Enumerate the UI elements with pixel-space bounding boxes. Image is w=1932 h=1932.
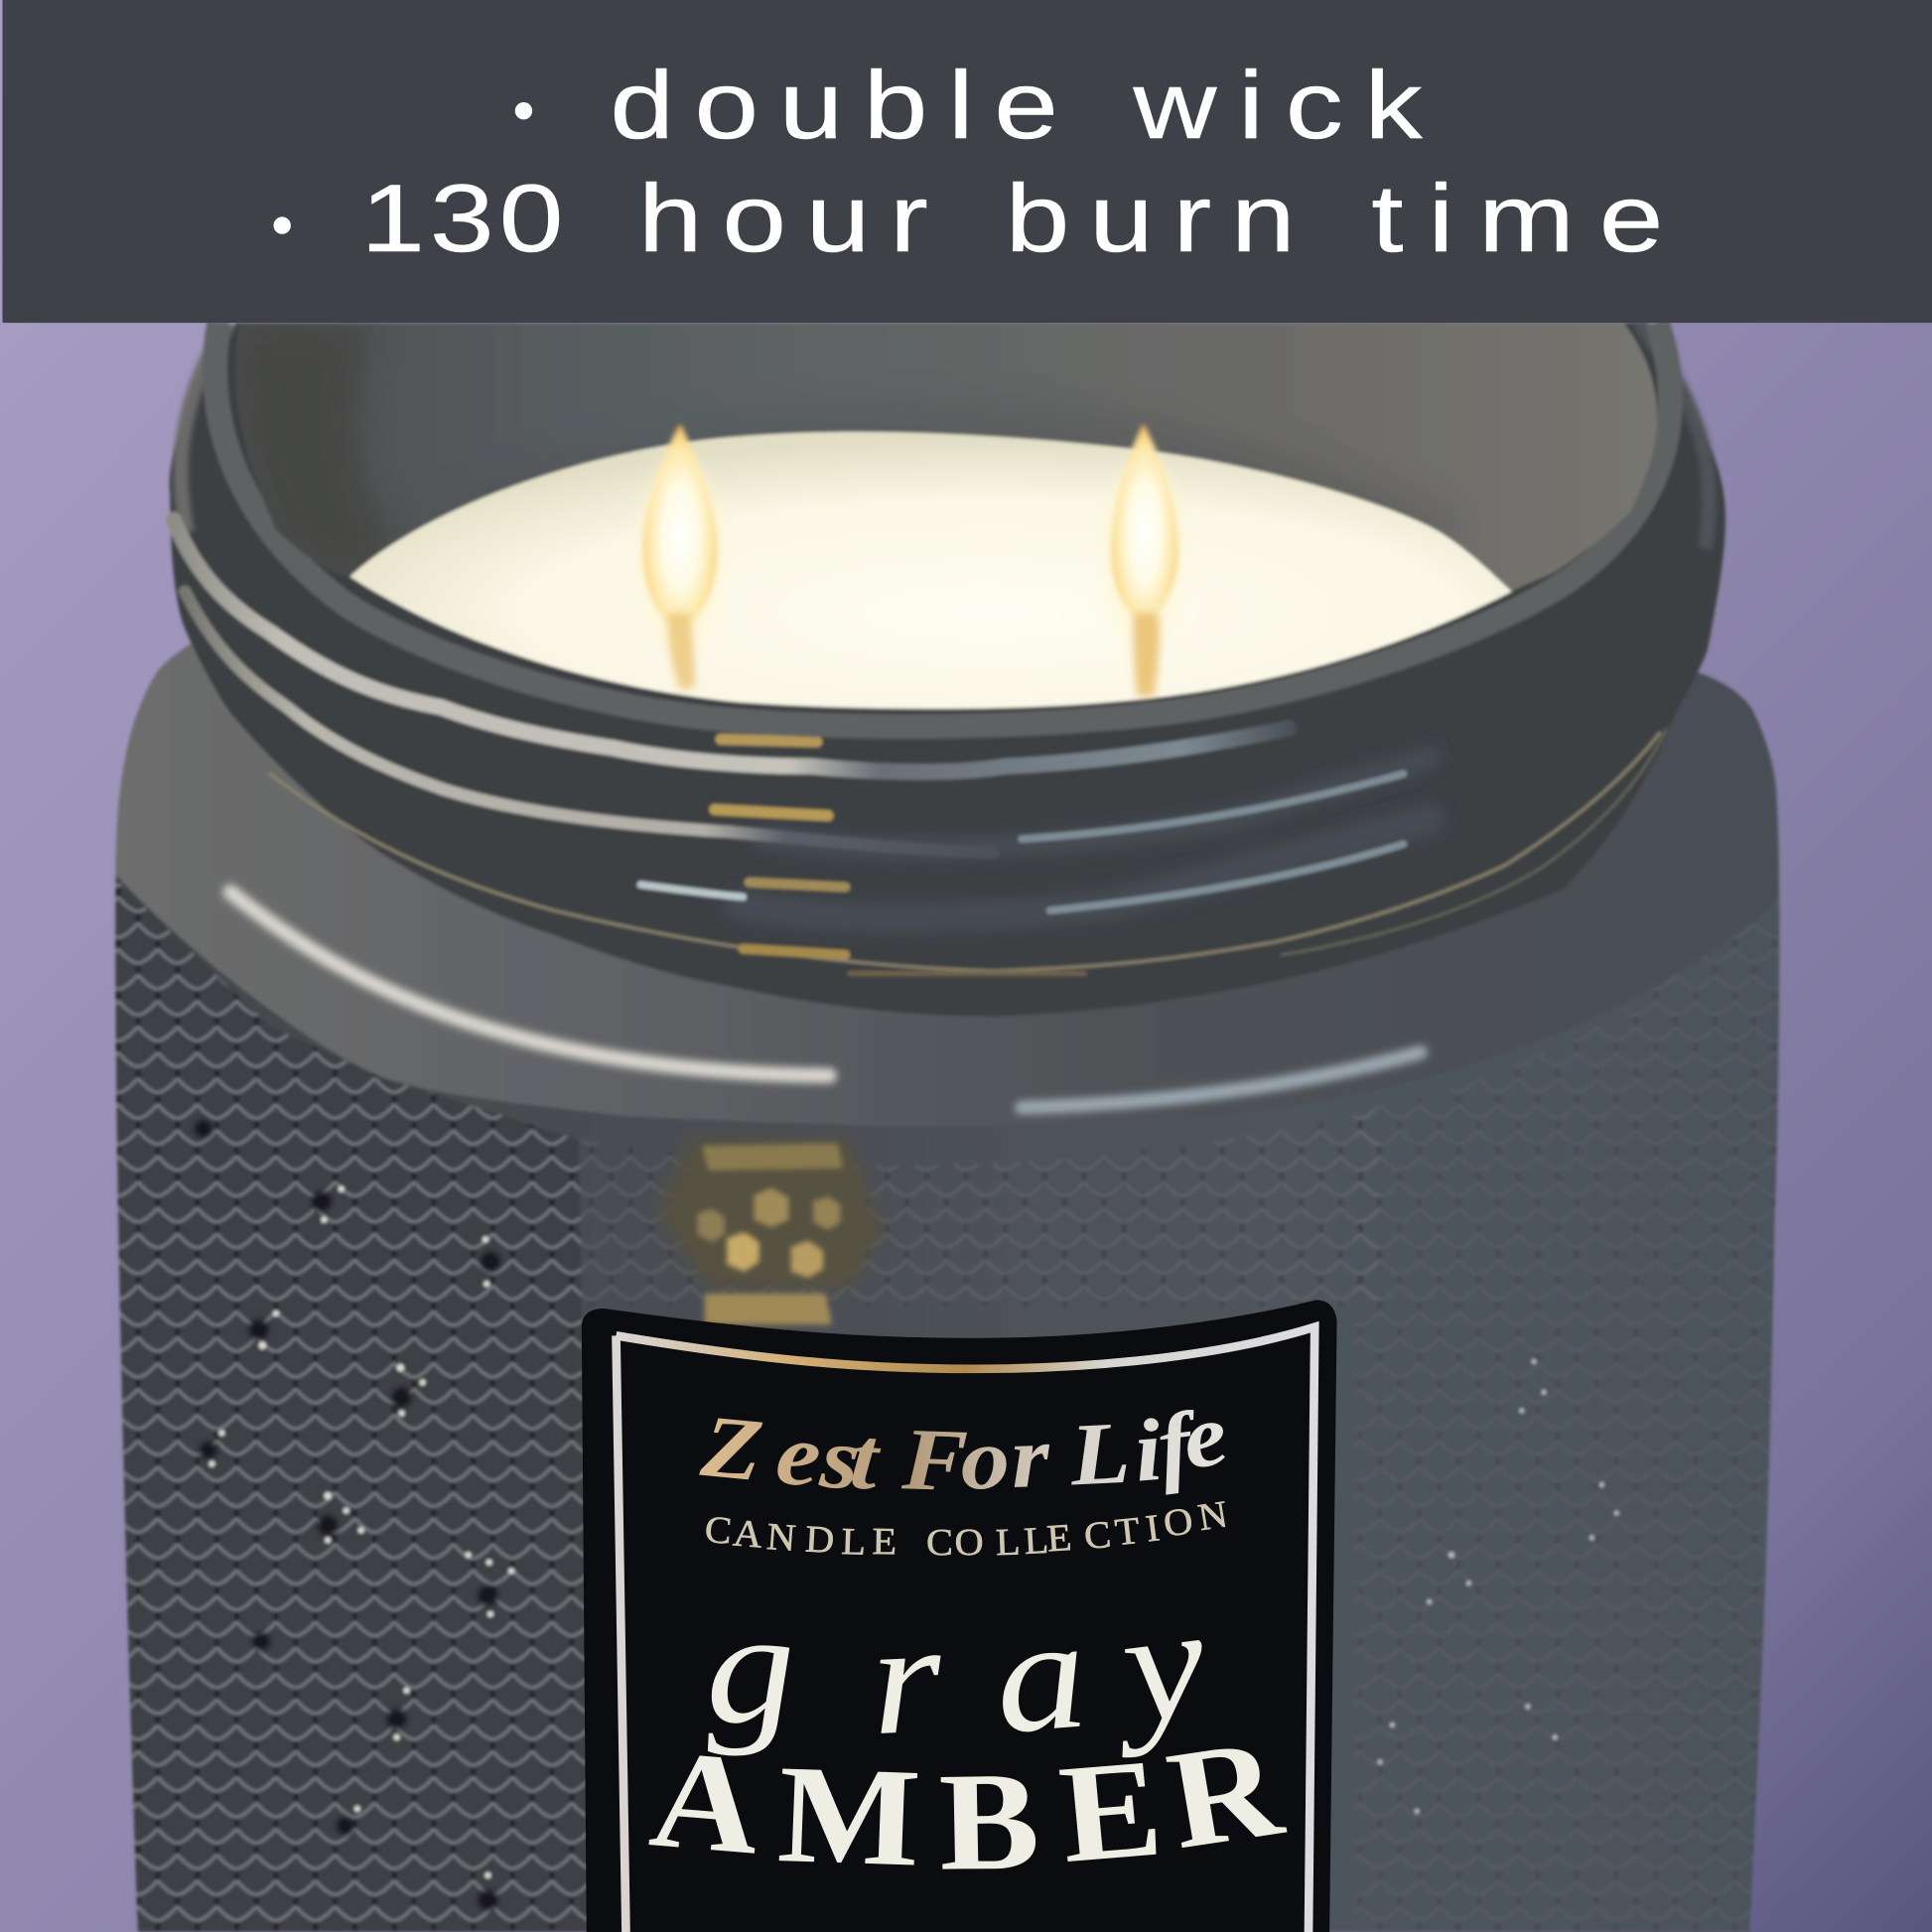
feature: double wick: double <box>610 51 1078 159</box>
brand name: ZestForLife <box>696 1385 1235 1510</box>
right flame <box>1102 424 1185 697</box>
jar opening glass interior <box>236 323 1659 592</box>
outer rim edge shading <box>181 323 1709 548</box>
product label <box>582 1300 1337 1932</box>
wax surface <box>349 432 1512 709</box>
banner background <box>2 0 1932 323</box>
collection line: CANDLECOLLECTION <box>703 1492 1231 1564</box>
feature: double wick: wick <box>1132 51 1444 159</box>
jar rim lip <box>214 323 1670 727</box>
label background <box>582 1300 1337 1932</box>
shoulder sheen <box>116 628 1778 1126</box>
scent name: gray: gray <box>701 1573 1218 1769</box>
candle jar <box>111 323 1787 1932</box>
gloss highlights on shoulder <box>230 893 1421 1108</box>
feature: 130 hour burn time: burn <box>1006 164 1314 272</box>
header banner <box>2 0 1932 323</box>
left flame <box>635 424 725 690</box>
glints on textured glass, right side <box>1378 1359 1619 1814</box>
embossed honeycomb texture <box>111 875 1787 1932</box>
bullet two <box>274 216 291 234</box>
threaded neck silhouette <box>170 323 1725 1017</box>
gold reflection of flame <box>659 1140 881 1324</box>
jar body <box>115 628 1779 1932</box>
flower motifs with glints, left side <box>195 1120 514 1910</box>
label border <box>617 1327 1314 1932</box>
feature: 130 hour burn time: time <box>1371 164 1688 272</box>
scent name: AMBER: AMBER <box>644 1708 1294 1900</box>
feature: 130 hour burn time: hour <box>638 164 948 272</box>
neck thread highlights <box>174 520 1666 973</box>
feature: 130 hour burn time: 130 <box>360 164 568 272</box>
bullet one <box>515 102 532 119</box>
feature text lines <box>360 51 1688 272</box>
